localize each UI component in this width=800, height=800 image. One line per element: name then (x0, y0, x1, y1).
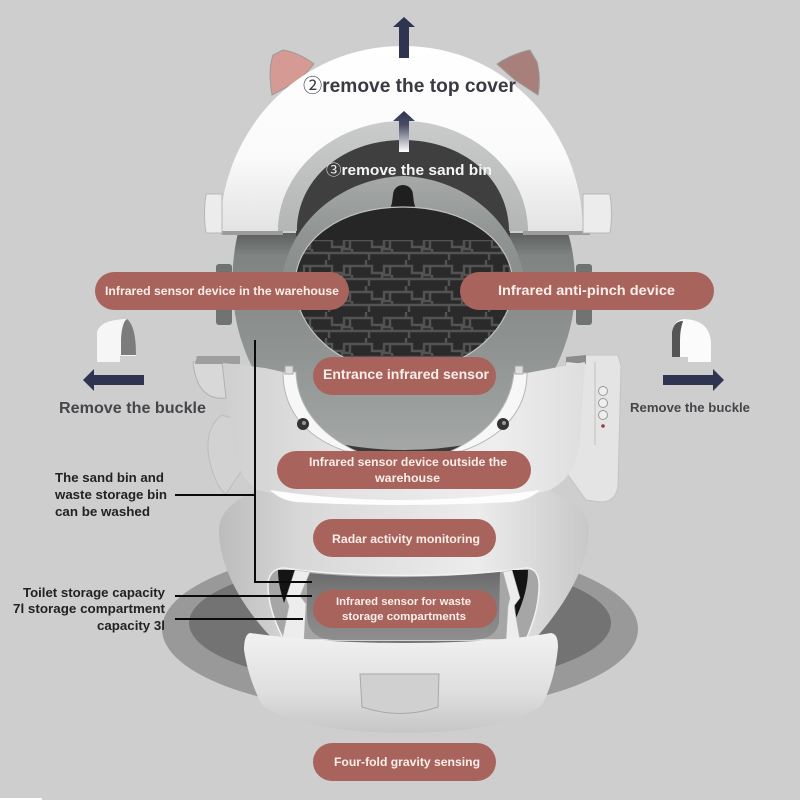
text: storage capacity: capacity 3l (97, 618, 165, 633)
callout: anti-pinch device: Infrared anti-pinch device (498, 282, 675, 298)
top cover dome (204, 46, 612, 235)
heading: remove the sand bin: ③remove the sand bin (326, 162, 492, 179)
callout: entrance sensor: Entrance infrared sensor (323, 366, 490, 382)
callout: sensor outside warehouse: Infrared sensor device outside the (309, 457, 507, 469)
callout: gravity sensing: Four-fold gravity sensing (334, 755, 480, 769)
right rail (503, 570, 520, 640)
inner arch rim (278, 121, 528, 231)
gray inner drum (233, 138, 575, 455)
callout: entrance sensor (313, 357, 496, 395)
callout: infrared sensor in warehouse: Infrared sensor device in the warehouse (105, 286, 339, 298)
callout: radar monitoring (313, 519, 496, 557)
waste compartment opening (268, 568, 539, 640)
left side lump (193, 356, 242, 494)
opening wall (268, 568, 539, 640)
callout: sensor outside warehouse: warehouse (374, 473, 440, 485)
callout: gravity sensing (313, 743, 496, 781)
grid hole (297, 208, 511, 357)
lower collar (223, 362, 585, 505)
screws (297, 418, 309, 430)
text: washable bins (54, 470, 167, 519)
keyhole notch (387, 185, 419, 212)
heading: remove the top cover: ②remove the top cover (303, 75, 517, 97)
callout: waste compartment sensor: Infrared sensor for waste (336, 596, 471, 608)
left rail (282, 570, 310, 640)
shadow at drum base (340, 444, 470, 452)
callout: anti-pinch device (460, 272, 714, 310)
label: remove the buckle left: Remove the buckle (59, 400, 206, 417)
lower ball body (219, 470, 589, 638)
text: storage capacity: Toilet storage capacity (23, 585, 166, 600)
callout: radar monitoring: Radar activity monitoring (332, 532, 480, 546)
floor plate (162, 545, 638, 713)
left arch rim (283, 372, 358, 452)
callout: waste compartment sensor (313, 590, 497, 628)
right control module (560, 355, 621, 502)
icon: left removed buckle (97, 319, 136, 362)
icon: left cat ear (270, 50, 314, 95)
side knobs (216, 264, 592, 325)
text: storage capacity (13, 585, 166, 633)
callout: infrared sensor in warehouse (95, 272, 349, 310)
dark corners (278, 570, 528, 618)
leader lines (175, 340, 312, 619)
drawer (244, 633, 558, 733)
text: washable bins: The sand bin and (55, 470, 164, 485)
text: washable bins: waste storage bin (54, 487, 167, 502)
left latch (204, 194, 222, 233)
corner mark (0, 798, 42, 800)
storage bin (307, 572, 500, 640)
text: storage capacity: 7l storage compartment (13, 601, 166, 616)
arrow: up sand bin (393, 111, 415, 152)
dark cavity above the bin (296, 138, 510, 236)
arrow: right buckle (663, 369, 724, 391)
icon: right cat ear (497, 50, 539, 95)
right arch rim (449, 372, 527, 452)
label: remove the buckle right: Remove the buckle (630, 401, 750, 415)
gray bin top (280, 176, 526, 300)
callout: sensor outside warehouse (277, 451, 531, 489)
arrow: up top cover (393, 17, 415, 58)
icon: right removed buckle (672, 319, 711, 362)
drawer handle (360, 674, 439, 714)
right latch (583, 194, 612, 233)
text: washable bins: can be washed (55, 504, 150, 519)
arrow: left buckle (83, 369, 144, 391)
callout: waste compartment sensor: storage compartments (342, 611, 466, 623)
